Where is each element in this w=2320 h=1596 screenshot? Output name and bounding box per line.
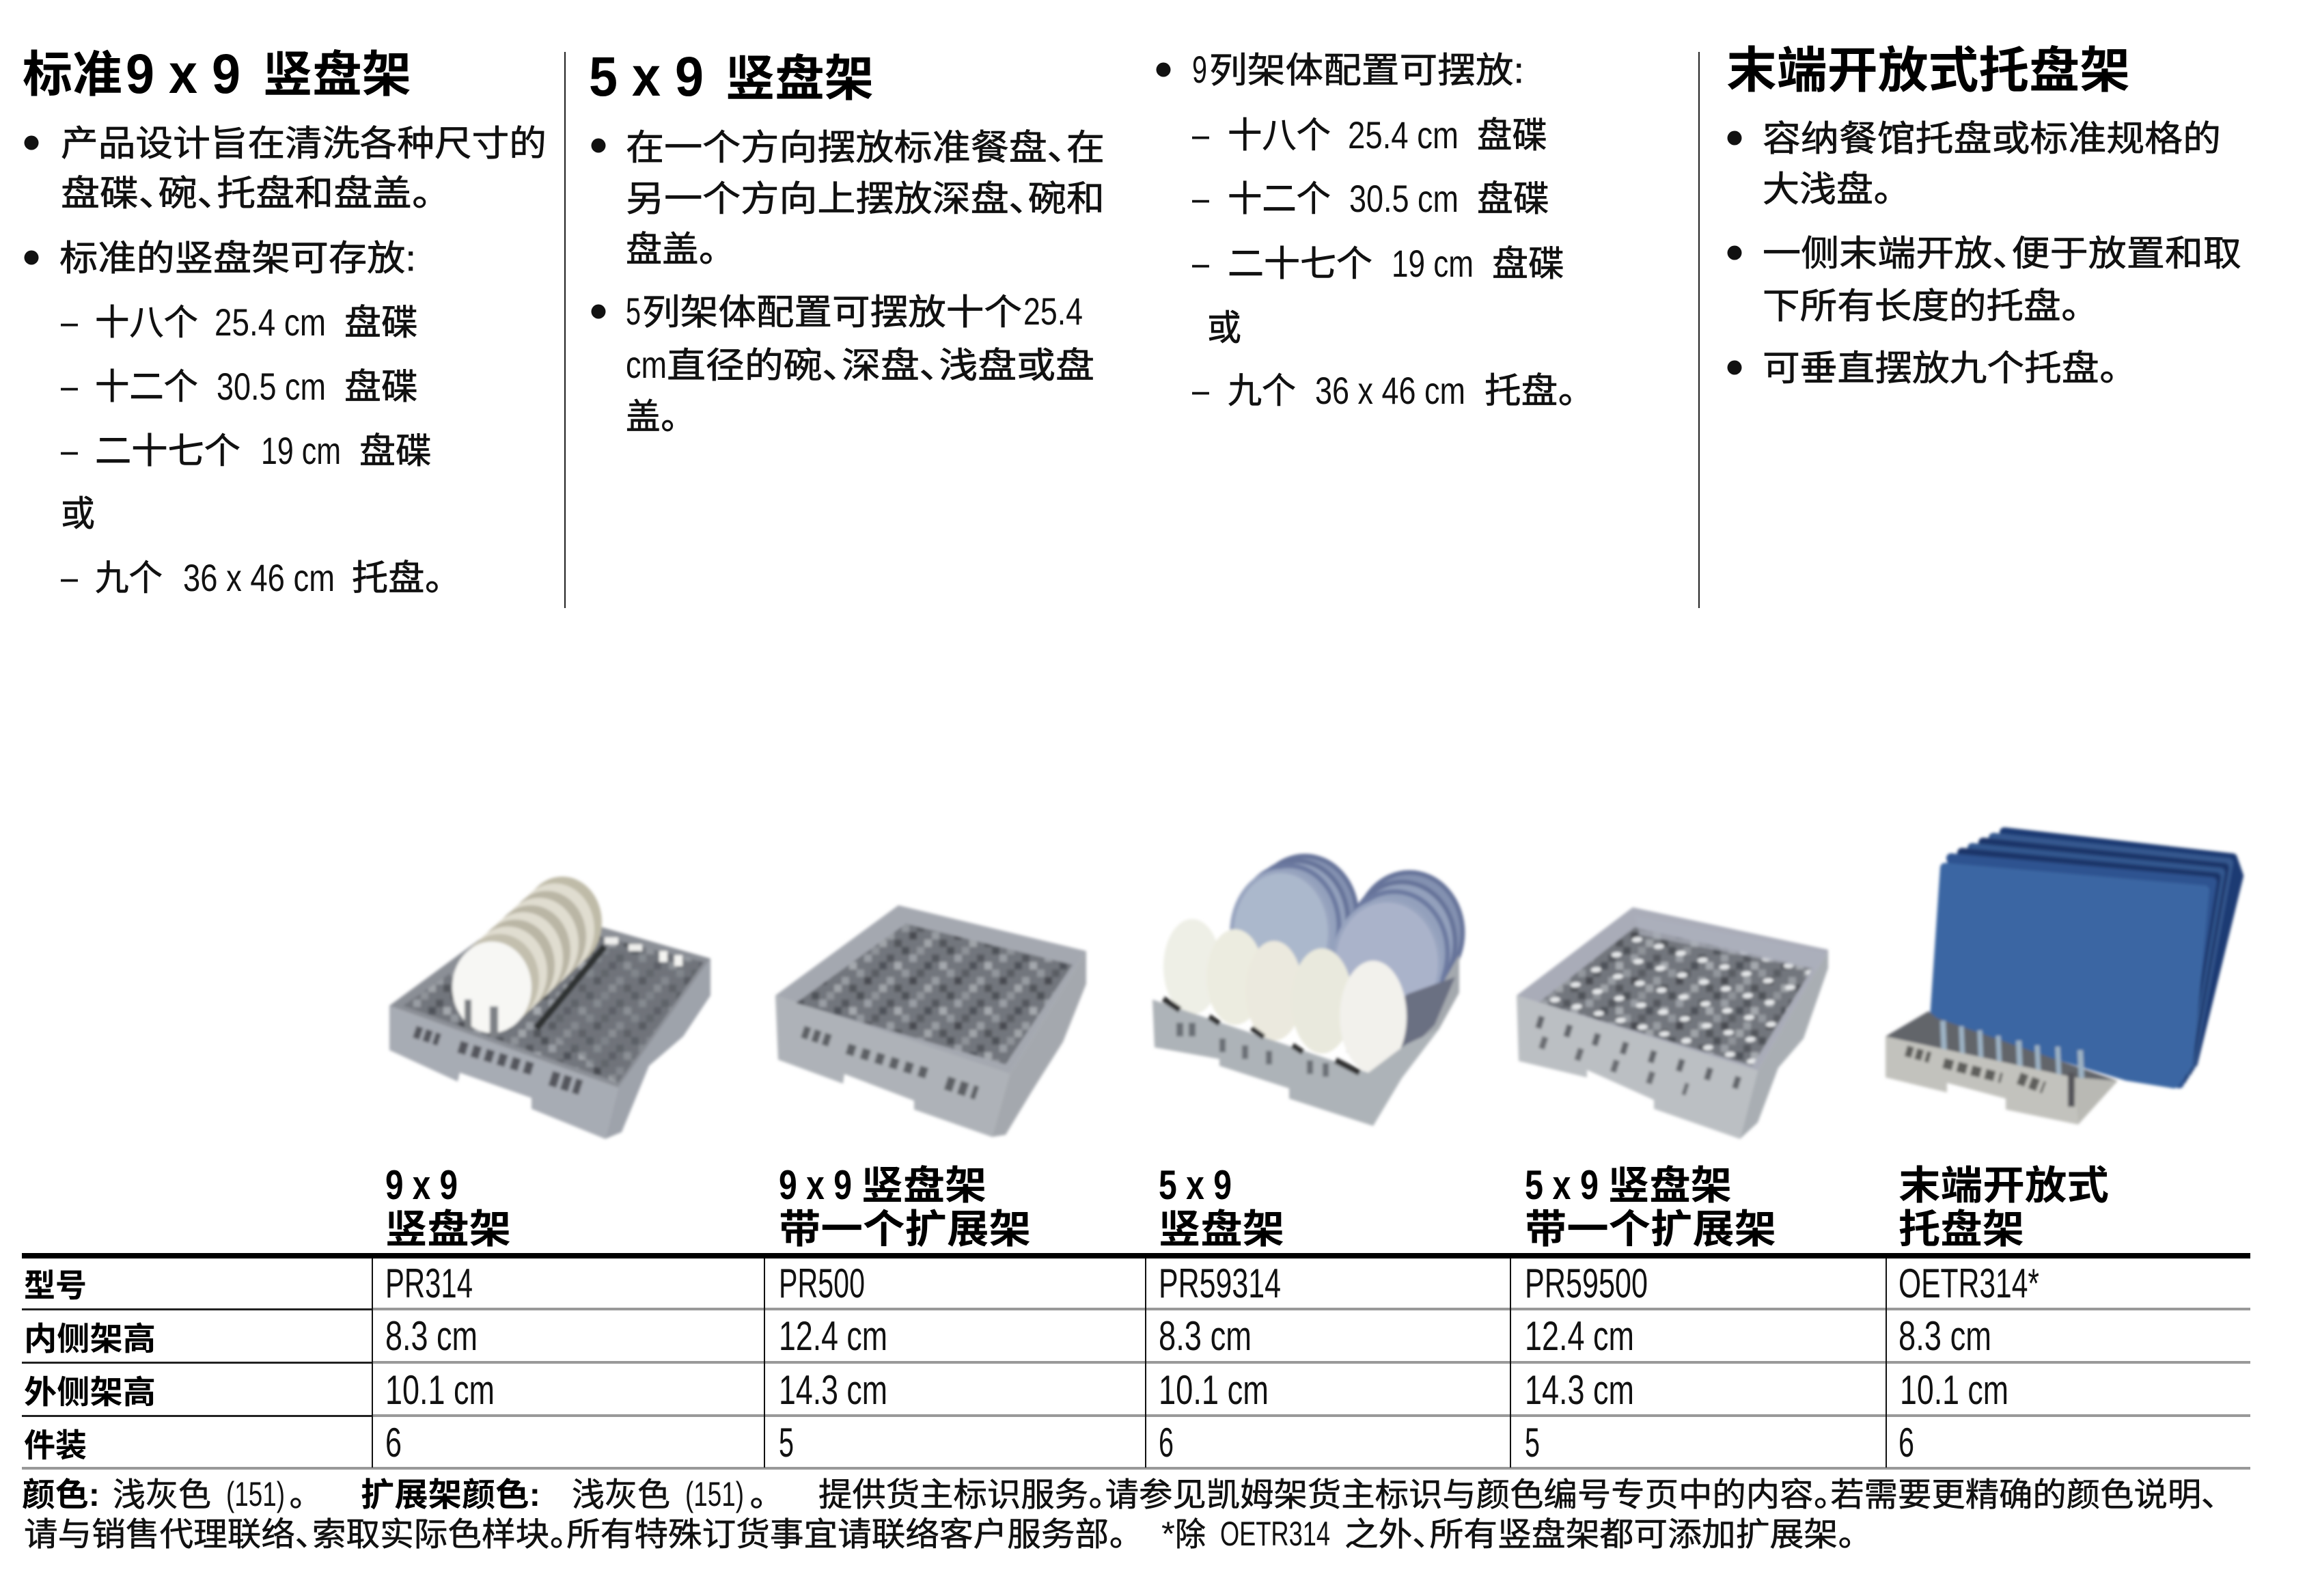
heading: standard 9 x 9 peg rack: 竖盘架: [263, 48, 411, 102]
bullet text: open end: 一侧末端开放、便于放置和取: [1763, 234, 2241, 274]
footnote text: 之外、所有竖盘架都可添加扩展架。: [1344, 1517, 1855, 1553]
footnote text: 请与销售代理联络、索取实际色样块。所有特殊订货事宜请联络客户服务部。: [24, 1517, 1126, 1553]
list: 9 column capacity: –: [1192, 176, 1210, 219]
row labels: 件装: [24, 1427, 87, 1463]
list: 9 column capacity: 托盘。: [1484, 372, 1576, 411]
list: 9 column capacity: 十八个: [1228, 116, 1331, 156]
footnote text: 提供货主标识服务。请参见凯姆架货主标识与颜色编号专页中的内容。若需要更精确的颜色说明、: [818, 1477, 2218, 1513]
bullet list: standard rack capacity: 十八个: [95, 303, 198, 343]
row labels: [24, 1267, 156, 1463]
column headers: 带一个扩展架: [1525, 1207, 1776, 1252]
row: case pack: 5: [1525, 1420, 1540, 1466]
footnote text: 浅灰色: [572, 1477, 670, 1513]
bullet text: product purpose: [25, 124, 547, 214]
column headers: 9 x 9: [779, 1162, 852, 1208]
bullet text: 5 column configuration: cm: [626, 343, 667, 386]
list: 9 column capacity: 36 x 46 cm: [1315, 369, 1465, 412]
footnote text: 扩展架颜色:: [361, 1477, 540, 1513]
heading: open-end tray rack: 末端开放式托盘架: [1726, 44, 2130, 98]
bullet list: standard rack capacity: 19 cm: [261, 429, 341, 472]
row: outer height: [385, 1367, 2008, 1413]
bullet list: standard rack capacity: 36 x 46 cm: [183, 556, 335, 599]
footnote text: (151): [226, 1475, 285, 1513]
row: model: [385, 1261, 2039, 1306]
panel: 5 x 9 peg rack description: [589, 46, 1105, 437]
column headers: 托盘架: [1898, 1207, 2024, 1252]
bullet list: standard rack capacity: 盘碟: [359, 432, 432, 471]
column headers: 9 x 9: [385, 1162, 458, 1208]
row: model: PR314: [385, 1261, 473, 1306]
bullet text: open end: 下所有长度的托盘。: [1763, 287, 2080, 327]
bullet text: product purpose: 产品设计旨在清洗各种尺寸的: [61, 124, 547, 164]
column headers: 竖盘架: [1159, 1207, 1284, 1252]
footnote text: 颜色:: [22, 1477, 100, 1513]
bullet list: standard rack capacity: –: [61, 428, 79, 471]
bullet list: standard rack capacity: 托盘。: [352, 559, 443, 598]
bullet list: standard rack capacity: 标准的竖盘架可存放:: [59, 239, 416, 279]
bullet text: open end: [1727, 234, 2241, 327]
table: rack specifications: [22, 1162, 2250, 1470]
list: 9 column capacity: 19 cm: [1392, 242, 1474, 285]
list: 9 column capacity: 或: [1207, 309, 1241, 348]
row: outer height: 14.3 cm: [1525, 1367, 1634, 1413]
row: case pack: 6: [1159, 1420, 1174, 1466]
heading: standard 9 x 9 peg rack: 9 x 9: [126, 43, 240, 105]
row: inner height: 12.4 cm: [1525, 1313, 1634, 1359]
bullet text: nine trays: 可垂直摆放九个托盘。: [1763, 349, 2118, 389]
row: outer height: 10.1 cm: [1159, 1367, 1269, 1413]
footnote text: OETR314: [1220, 1515, 1330, 1553]
row: model: PR500: [779, 1261, 865, 1306]
list: 9 column capacity: 盘碟: [1477, 180, 1549, 219]
bullet list: standard rack capacity: 25.4 cm: [215, 301, 326, 344]
bullet text: orientation: [592, 128, 1105, 270]
bullet heading: 9 column configuration: 列架体配置可摆放:: [1209, 51, 1524, 91]
column headers: 竖盘架: [1608, 1164, 1732, 1208]
row: case pack: 6: [385, 1420, 402, 1466]
bullet list: standard rack capacity: –: [61, 364, 79, 407]
list: 9 column capacity: –: [1192, 241, 1210, 284]
panel: 9 column configuration: [1156, 48, 1576, 412]
row: case pack: [385, 1420, 1914, 1466]
row: inner height: 12.4 cm: [779, 1313, 887, 1359]
bullet text: holds trays: 容纳餐馆托盘或标准规格的: [1763, 120, 2221, 159]
row labels: 内侧架高: [24, 1321, 156, 1357]
row: outer height: 14.3 cm: [779, 1367, 887, 1413]
footnote text: [22, 1475, 2218, 1553]
row: inner height: [385, 1313, 1991, 1359]
bullet text: 5 column configuration: [592, 290, 1094, 437]
footnote text: 。: [749, 1477, 767, 1513]
bullet list: standard rack capacity: 二十七个: [95, 432, 240, 471]
column headers: 5 x 9: [1525, 1162, 1599, 1208]
heading: 5 x 9 peg rack: [589, 46, 874, 108]
bullet heading: 9 column configuration: 9: [1192, 48, 1207, 91]
product image: 9 x 9 rack with extender: [775, 905, 1086, 1137]
column headers: [385, 1162, 2109, 1252]
list: 9 column capacity: –: [1192, 113, 1210, 156]
column headers: 5 x 9: [1159, 1162, 1232, 1208]
column headers: 竖盘架: [861, 1164, 986, 1208]
bullet list: standard rack capacity: 盘碟: [344, 303, 418, 343]
bullet list: standard rack capacity: –: [61, 555, 79, 598]
heading: standard 9 x 9 peg rack: 标准: [23, 48, 122, 102]
panel: standard 9 x 9 peg rack description: [23, 43, 547, 599]
heading: 5 x 9 peg rack: 5 x 9: [589, 46, 704, 108]
product image: 9 x 9 rack with plates: [389, 877, 710, 1139]
bullet list: standard rack capacity: 盘碟: [344, 368, 418, 407]
list: 9 column capacity: [1192, 113, 1576, 412]
panel: open-end tray rack description: [1726, 44, 2241, 389]
product image: 5 x 9 rack with plates: [1152, 856, 1463, 1126]
bullet list: standard rack capacity: 十二个: [95, 368, 198, 407]
row: model: PR59500: [1525, 1261, 1648, 1306]
bullet text: product purpose: 盘碟、碗、托盘和盘盖。: [61, 174, 431, 214]
bullet list: standard rack capacity: [25, 239, 443, 599]
bullet text: orientation: 在一个方向摆放标准餐盘、在: [626, 128, 1105, 168]
bullet list: standard rack capacity: 九个: [95, 559, 163, 598]
row: outer height: 10.1 cm: [1900, 1367, 2008, 1413]
row: inner height: 8.3 cm: [1159, 1313, 1252, 1359]
row labels: 型号: [24, 1267, 87, 1304]
bullet text: 5 column configuration: 5: [626, 290, 641, 333]
bullet text: 5 column configuration: 直径的碗、深盘、浅盘或盘: [667, 346, 1094, 386]
bullet text: 5 column configuration: 盖。: [626, 398, 678, 437]
row: model: PR59314: [1159, 1261, 1281, 1306]
footnote text: *: [1161, 1515, 1175, 1553]
bullet list: standard rack capacity: –: [61, 300, 79, 343]
footnote text: 浅灰色: [113, 1477, 211, 1513]
list: 9 column capacity: 25.4 cm: [1348, 113, 1459, 156]
bullet text: orientation: 盘盖。: [626, 230, 717, 270]
list: 9 column capacity: 二十七个: [1228, 245, 1372, 284]
row: inner height: 8.3 cm: [1898, 1313, 1991, 1359]
row labels: 外侧架高: [24, 1374, 156, 1410]
heading: 5 x 9 peg rack: 竖盘架: [726, 52, 874, 107]
bullet text: holds trays: [1727, 120, 2221, 210]
list: 9 column capacity: 30.5 cm: [1349, 177, 1459, 220]
column headers: 竖盘架: [385, 1207, 511, 1252]
row: inner height: 8.3 cm: [385, 1313, 478, 1359]
list: 9 column capacity: –: [1192, 368, 1210, 411]
bullet list: standard rack capacity: 30.5 cm: [217, 365, 326, 408]
column headers: 带一个扩展架: [779, 1207, 1031, 1252]
list: 9 column capacity: 盘碟: [1477, 116, 1547, 156]
footnote text: 。: [289, 1477, 305, 1513]
bullet text: 5 column configuration: 25.4: [1023, 290, 1083, 333]
list: 9 column capacity: 盘碟: [1492, 245, 1564, 284]
row: case pack: 6: [1898, 1420, 1914, 1466]
bullet text: 5 column configuration: 列架体配置可摆放十个: [642, 293, 1022, 333]
product image: open-end rack with blue trays: [1886, 832, 2239, 1125]
list: 9 column capacity: 十二个: [1228, 180, 1331, 219]
list: 9 column capacity: 九个: [1228, 372, 1296, 411]
bullet text: orientation: 另一个方向上摆放深盘、碗和: [626, 180, 1105, 219]
bullet list: standard rack capacity: 或: [61, 495, 95, 534]
footnote text: 除: [1175, 1517, 1206, 1553]
row: outer height: 10.1 cm: [385, 1367, 495, 1413]
row: model: OETR314*: [1898, 1261, 2039, 1306]
footnote text: (151): [685, 1475, 744, 1513]
row: case pack: 5: [779, 1420, 794, 1466]
heading: standard 9 x 9 peg rack: [23, 43, 411, 105]
bullet text: holds trays: 大浅盘。: [1763, 170, 1892, 210]
column headers: 末端开放式: [1898, 1164, 2109, 1208]
product image: 5 x 9 rack with extender: [1517, 907, 1828, 1139]
